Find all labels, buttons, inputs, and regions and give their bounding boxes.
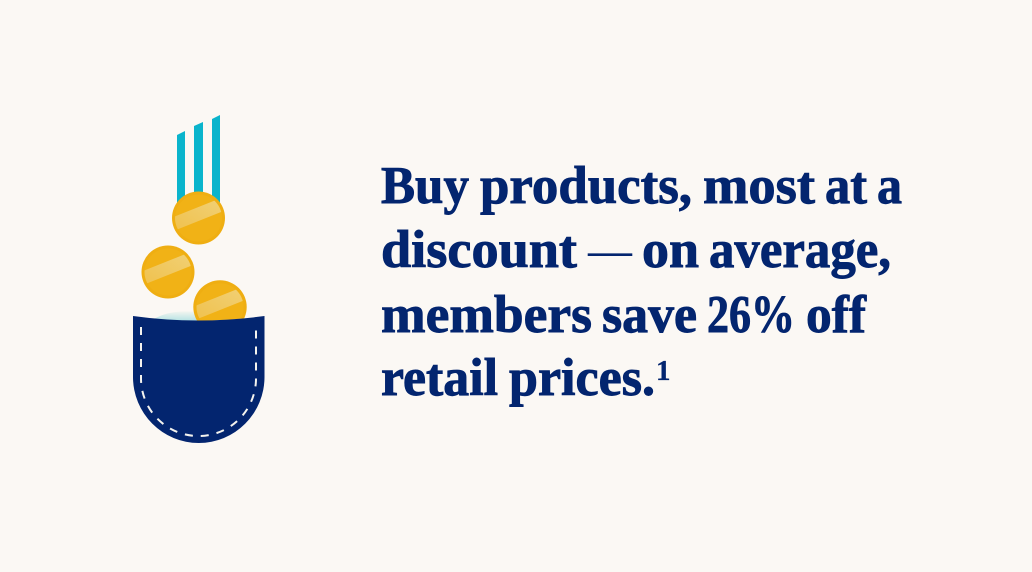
icon: top coin [172, 192, 225, 244]
text line 1: products, [480, 157, 692, 215]
text line 3: 26% [707, 286, 795, 344]
icon: pocket stitching [141, 327, 256, 436]
icon: right coin in pocket [193, 280, 247, 320]
icon: teal motion stripes [177, 115, 220, 205]
text line 3: members [381, 286, 592, 344]
text line 3: off [806, 286, 867, 344]
icon: navy pocket [133, 316, 264, 443]
text line 1: a [877, 157, 902, 215]
text line 3: save [602, 286, 697, 344]
text line 4: prices. [509, 349, 655, 407]
text line 2: — [587, 221, 633, 279]
text line 4: retail [381, 349, 498, 407]
illustration: coins falling into pocket [133, 115, 264, 443]
footnote marker: 1 [656, 355, 670, 387]
heading: savings statement [381, 157, 902, 407]
text line 2: on [642, 221, 699, 279]
text line 3 [381, 286, 867, 344]
text line 2 [381, 221, 891, 279]
text line 1: Buy [381, 157, 469, 215]
text line 2: discount [381, 221, 577, 279]
text line 1 [381, 157, 902, 215]
text line 1: at [825, 157, 867, 215]
text line 4 [381, 349, 655, 407]
icon: mist above pocket [152, 311, 197, 322]
text line 2: average, [709, 221, 891, 279]
text line 1: most [703, 157, 815, 215]
icon: left coin [142, 246, 194, 298]
